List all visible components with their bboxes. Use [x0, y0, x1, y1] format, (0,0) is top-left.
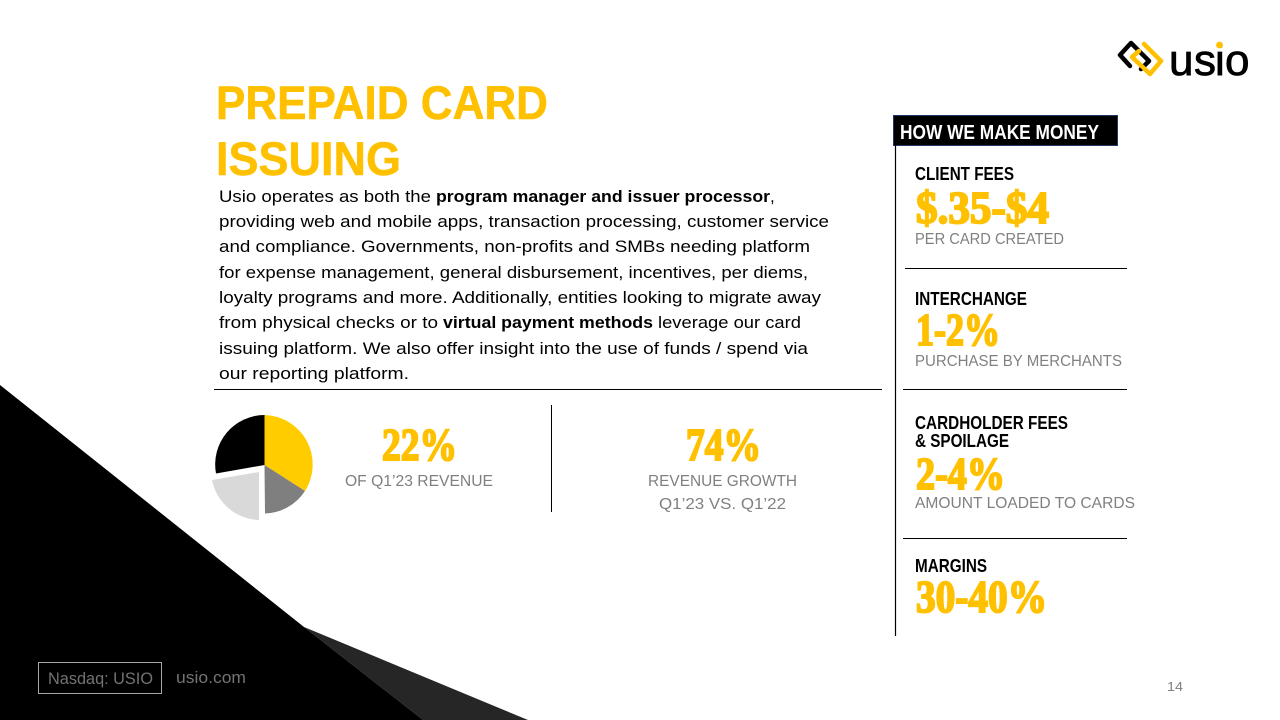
stat: 74% revenue growth [648, 419, 797, 513]
title: PREPAID CARD [216, 76, 548, 129]
item: cardholder fees and spoilage [915, 413, 1135, 512]
stat: 22% of revenue: 22% [382, 419, 457, 470]
body paragraph: loyalty programs and more. Additionally, entities looking to migrate away [219, 288, 822, 307]
footer: website: usio.com [176, 669, 246, 687]
item: margins: 30-40% [916, 571, 1047, 622]
body paragraph: our reporting platform. [219, 364, 409, 383]
panel header [894, 116, 1118, 146]
item: cardholder fees and spoilage: & SPOILAGE [915, 431, 1009, 451]
item: client fees: $.35-$4 [916, 182, 1049, 233]
panel: how we make money [894, 116, 1135, 636]
body paragraph: for expense management, general disbursement, incentives, per diems, [219, 263, 808, 282]
page number: 14 [1167, 679, 1183, 694]
footer: Nasdaq ticker box [38, 662, 162, 694]
icon: usio logo [1120, 36, 1249, 85]
stat: 22% of revenue [345, 419, 493, 490]
footer dark triangle [304, 627, 528, 720]
body paragraph: leverage our card [658, 313, 801, 332]
body paragraph: issuing platform. We also offer insight into the use of funds / spend via [219, 339, 809, 358]
item: margins [915, 556, 1047, 622]
stat: 74% revenue growth: 74% [686, 419, 761, 470]
body paragraph: providing web and mobile apps, transaction processing, customer service [219, 212, 829, 231]
title [216, 76, 548, 185]
item: cardholder fees and spoilage: 2-4% [916, 448, 1005, 499]
stat: 74% revenue growth: Q1’23 VS. Q1’22 [659, 496, 786, 513]
body paragraph: and compliance. Governments, non-profits and SMBs needing platform [219, 237, 810, 256]
stat: 22% of revenue: OF Q1’23 REVENUE [345, 473, 493, 490]
body paragraph: , [770, 187, 775, 206]
footer black triangle [0, 385, 423, 720]
item: interchange [915, 289, 1122, 370]
item: client fees: PER CARD CREATED [915, 231, 1064, 248]
body paragraph: Usio operates as both the [219, 187, 431, 206]
item: client fees [915, 164, 1064, 248]
title: ISSUING [216, 132, 401, 185]
stat: 74% revenue growth: REVENUE GROWTH [648, 473, 797, 490]
body paragraph [219, 187, 829, 383]
body paragraph: from physical checks or to [219, 313, 438, 332]
pie chart [212, 415, 313, 520]
item: cardholder fees and spoilage: CARDHOLDER FEES [915, 413, 1068, 433]
item: interchange: 1-2% [916, 304, 1000, 355]
panel header: HOW WE MAKE MONEY [900, 122, 1100, 144]
item: cardholder fees and spoilage: AMOUNT LOADED TO CARDS [915, 495, 1135, 512]
icon: usio logo: usio [1169, 36, 1249, 85]
body paragraph: virtual payment methods [443, 313, 653, 332]
body paragraph: program manager and issuer processor [436, 187, 770, 206]
item: client fees: CLIENT FEES [915, 164, 1014, 184]
item: interchange: INTERCHANGE [915, 289, 1027, 309]
item: margins: MARGINS [915, 556, 987, 576]
footer: Nasdaq ticker box: Nasdaq: USIO [48, 670, 153, 688]
item: interchange: PURCHASE BY MERCHANTS [915, 353, 1122, 370]
